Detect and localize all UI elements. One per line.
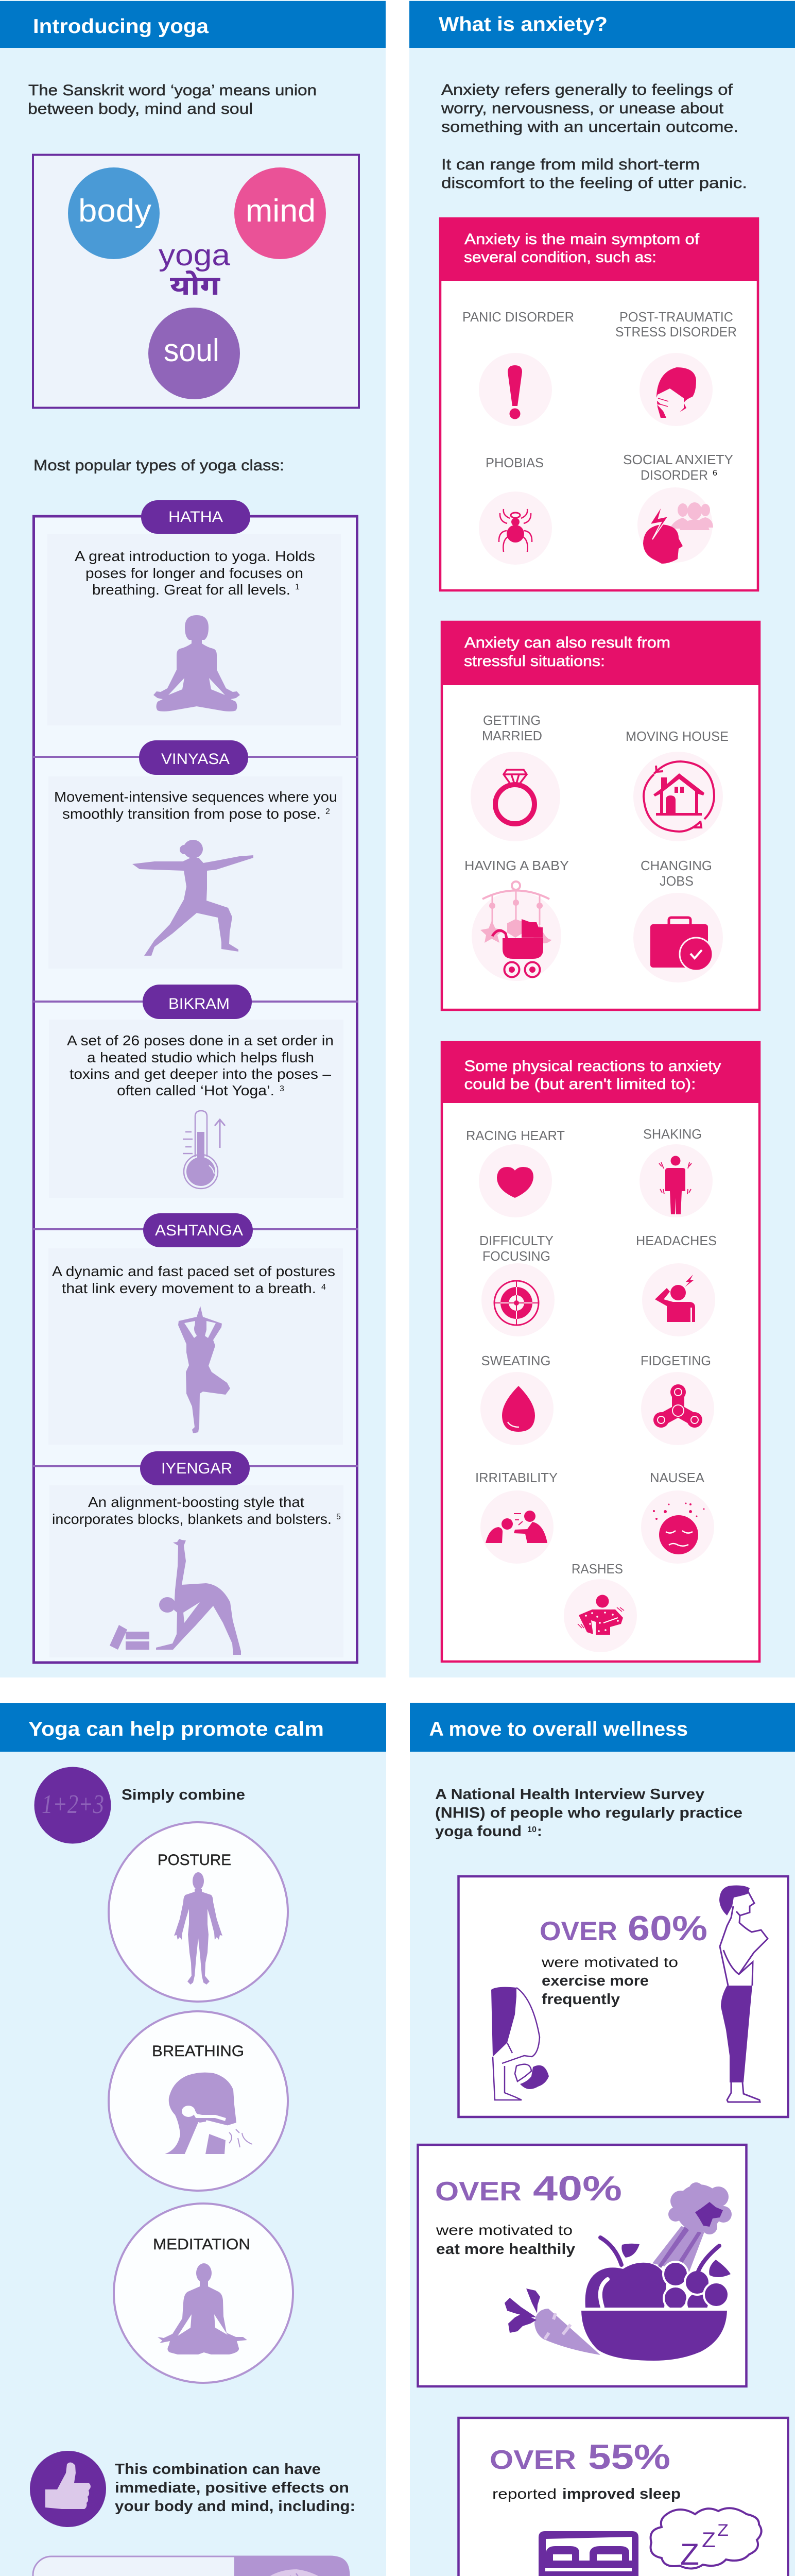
- icon: seated lotus pose: [153, 615, 240, 711]
- stat: exercise: frequently: [542, 1991, 620, 2008]
- item: phobias: PHOBIAS: [486, 455, 544, 470]
- item: having a baby: [464, 858, 569, 981]
- class: bikram: a heated studio which helps flush: [87, 1049, 314, 1065]
- item: social anxiety: SOCIAL ANXIETY: [623, 452, 733, 467]
- class: hatha: 1: [295, 583, 300, 591]
- class: ashtanga: ASHTANGA: [155, 1222, 243, 1239]
- heading bar: promote calm: Yoga can help promote calm: [28, 1718, 324, 1740]
- combination text: [115, 2461, 355, 2515]
- benefit: concentration: [33, 2556, 350, 2576]
- class: ashtanga: A dynamic and fast paced set of postures: [52, 1263, 335, 1279]
- panel: stressful situations: stressful situations:: [464, 653, 605, 670]
- panel: a move to overall wellness: [410, 1703, 795, 2576]
- panel: stressful situations: [441, 621, 761, 1010]
- stat: improved sleep: OVER: [490, 2445, 576, 2475]
- item: phobias: [479, 455, 552, 565]
- panel: stressful situations: Anxiety can also result from: [464, 634, 670, 651]
- item: fidgeting: [641, 1353, 714, 1445]
- heading bar: introducing yoga: Introducing yoga: [33, 15, 209, 38]
- stat: eat healthily: [418, 2145, 747, 2386]
- item: racing heart: RACING HEART: [466, 1128, 565, 1143]
- item: social anxiety: DISORDER: [641, 467, 708, 483]
- class: hatha: breathing. Great for all levels.: [92, 582, 290, 598]
- icon: tree pose: [178, 1306, 230, 1433]
- icon: standing man: [719, 1886, 768, 2102]
- item: moving house: MOVING HOUSE: [626, 728, 729, 744]
- item: social anxiety: 6: [713, 469, 717, 478]
- icon: triangle pose with blocks: [110, 1539, 241, 1655]
- panel: conditions: several condition, such as:: [464, 249, 656, 266]
- panel: physical reactions: [441, 1041, 761, 1662]
- panel: yoga class list: [33, 500, 358, 1663]
- survey text: 10: [527, 1825, 537, 1834]
- circle: breathing: BREATHING: [152, 2043, 244, 2060]
- item: rashes: [564, 1561, 637, 1652]
- anxiety definition text: Anxiety refers generally to feelings of: [441, 81, 733, 98]
- circle: posture: POSTURE: [158, 1852, 231, 1869]
- diagram: body mind soul: योग: [170, 271, 220, 306]
- class: ashtanga: [33, 1213, 358, 1445]
- item: moving house: [626, 728, 729, 841]
- heading bar: introducing yoga: [0, 1, 386, 48]
- class: ashtanga: 4: [321, 1283, 326, 1292]
- stat: eat healthily: 40%: [533, 2169, 622, 2208]
- panel: introducing yoga: [0, 0, 386, 1677]
- class: bikram: A set of 26 poses done in a set order in: [67, 1032, 334, 1048]
- item: racing heart: [466, 1128, 565, 1217]
- class: iyengar: incorporates blocks, blankets and bolsters.: [52, 1511, 332, 1527]
- class: bikram: 3: [280, 1084, 284, 1093]
- stat: eat healthily: were motivated to: [436, 2222, 573, 2238]
- item: rashes: RASHES: [572, 1561, 623, 1577]
- icon: 1+2+3 badge: 1+2+3: [42, 1790, 104, 1819]
- item: headaches: HEADACHES: [636, 1233, 717, 1248]
- stat: exercise: exercise more: [542, 1973, 649, 1989]
- panel: conditions: Anxiety is the main symptom of: [464, 231, 700, 248]
- class: bikram: often called ‘Hot Yoga’.: [117, 1082, 274, 1098]
- heading bar: what is anxiety: What is anxiety?: [439, 13, 608, 36]
- stat: exercise: [458, 1876, 788, 2117]
- subheading: simply combine: Simply combine: [122, 1787, 245, 1803]
- item: irritability: IRRITABILITY: [475, 1470, 558, 1485]
- icon: fruit and vegetable bowl: [505, 2182, 732, 2361]
- item: changing jobs: [633, 858, 723, 982]
- item: PTSD: [615, 309, 737, 426]
- item: fidgeting: FIDGETING: [641, 1353, 711, 1368]
- class: iyengar: An alignment-boosting style that: [88, 1494, 304, 1510]
- intro text: [28, 82, 317, 117]
- stat: eat healthily: eat more healthily: [436, 2241, 575, 2258]
- class: iyengar: [33, 1451, 358, 1657]
- stat: improved sleep: 55%: [588, 2437, 670, 2477]
- class: vinyasa: smoothly transition from pose to pose.: [62, 806, 321, 822]
- heading bar: overall wellness: A move to overall wellness: [429, 1718, 688, 1740]
- class: bikram: [33, 985, 358, 1198]
- circle: breathing: [109, 2011, 288, 2191]
- heading bar: what is anxiety: [409, 1, 795, 48]
- diagram: body mind soul: body: [78, 193, 151, 229]
- anxiety definition text: discomfort to the feeling of utter panic.: [441, 175, 747, 192]
- icon: 1+2+3 badge: [34, 1767, 111, 1843]
- class: hatha: poses for longer and focuses on: [85, 565, 303, 581]
- item: shaking: [640, 1126, 713, 1217]
- item: panic disorder: [462, 309, 574, 426]
- combination text: This combination can have: [115, 2461, 321, 2478]
- combination text: immediate, positive effects on: [115, 2480, 349, 2496]
- circle: meditation: [114, 2204, 293, 2383]
- item: sweating: [480, 1353, 554, 1445]
- icon: forward bending figure: [491, 1987, 549, 2100]
- icon: bed: [539, 2531, 638, 2576]
- item: nausea: [641, 1470, 714, 1564]
- item: PTSD: STRESS DISORDER: [615, 324, 737, 340]
- class: vinyasa: 2: [325, 807, 330, 816]
- survey text: yoga found: [435, 1823, 522, 1840]
- item: getting married: MARRIED: [482, 728, 542, 743]
- icon: sleep cloud: Z: [680, 2538, 699, 2571]
- item: sweating: SWEATING: [481, 1353, 551, 1368]
- diagram: body mind soul: yoga: [159, 239, 231, 272]
- icon: sleep cloud: Z: [702, 2528, 716, 2552]
- anxiety definition text: [441, 81, 747, 192]
- item: PTSD: POST-TRAUMATIC: [619, 309, 733, 325]
- icon: sleep cloud: [651, 2508, 762, 2571]
- panel: physical reactions: could be (but aren't limited to):: [464, 1076, 696, 1093]
- intro text: between body, mind and soul: [28, 100, 253, 117]
- item: irritability: [475, 1470, 558, 1564]
- panel: yoga can help promote calm: [0, 1703, 386, 2576]
- class: iyengar: IYENGAR: [161, 1460, 232, 1477]
- icon: warrior pose: [132, 840, 253, 956]
- class: vinyasa: Movement-intensive sequences where you: [54, 789, 337, 805]
- item: getting married: [471, 713, 560, 841]
- survey text: A National Health Interview Survey: [435, 1786, 704, 1803]
- item: difficulty focusing: FOCUSING: [482, 1248, 550, 1264]
- diagram: body mind soul: soul: [164, 333, 219, 368]
- class: hatha: HATHA: [168, 509, 223, 526]
- icon: sleep cloud: Z: [717, 2521, 729, 2539]
- stat: exercise: 60%: [628, 1909, 707, 1948]
- panel: conditions: [439, 217, 759, 590]
- icon: brain: [250, 2569, 333, 2576]
- anxiety definition text: It can range from mild short-term: [441, 156, 700, 173]
- intro text: The Sanskrit word ‘yoga’ means union: [28, 82, 317, 99]
- circle: posture: [109, 1822, 288, 2002]
- panel: what is anxiety: [409, 0, 795, 1677]
- item: having a baby: HAVING A BABY: [464, 858, 569, 873]
- class: vinyasa: [33, 740, 358, 969]
- subheading: class types: Most popular types of yoga class:: [33, 457, 284, 474]
- item: changing jobs: CHANGING: [641, 858, 712, 873]
- class: bikram: toxins and get deeper into the poses –: [70, 1066, 331, 1082]
- icon: thumbs up badge: [30, 2451, 106, 2527]
- class: ashtanga: that link every movement to a breath.: [62, 1280, 316, 1296]
- combination text: your body and mind, including:: [115, 2498, 355, 2515]
- icon: thermometer: [183, 1111, 225, 1189]
- stat: eat healthily: OVER: [435, 2177, 522, 2207]
- item: panic disorder: PANIC DISORDER: [462, 309, 574, 325]
- item: social anxiety: [623, 452, 733, 564]
- survey text: [435, 1786, 742, 1840]
- class: hatha: [47, 500, 341, 725]
- item: difficulty focusing: [479, 1233, 555, 1336]
- item: changing jobs: JOBS: [660, 873, 694, 889]
- heading bar: promote calm: [0, 1703, 386, 1752]
- item: difficulty focusing: DIFFICULTY: [479, 1233, 554, 1248]
- diagram: body mind soul: mind: [246, 193, 316, 229]
- stat: exercise: were motivated to: [541, 1954, 678, 1970]
- heading bar: overall wellness: [410, 1703, 795, 1752]
- anxiety definition text: something with an uncertain outcome.: [441, 118, 738, 135]
- diagram: body mind soul: [33, 155, 359, 408]
- panel: physical reactions: Some physical reactions to anxiety: [464, 1058, 721, 1075]
- class: iyengar: 5: [336, 1513, 341, 1521]
- stat: improved sleep: reported: [492, 2486, 557, 2502]
- stat: improved sleep: [458, 2418, 788, 2576]
- item: nausea: NAUSEA: [650, 1470, 705, 1485]
- anxiety definition text: worry, nervousness, or unease about: [441, 100, 724, 117]
- item: getting married: GETTING: [483, 713, 541, 728]
- circle: meditation: MEDITATION: [153, 2236, 250, 2253]
- stat: exercise: OVER: [540, 1917, 617, 1946]
- class: vinyasa: VINYASA: [161, 751, 230, 768]
- class: bikram: BIKRAM: [168, 995, 230, 1012]
- stat: improved sleep: improved sleep: [562, 2486, 681, 2502]
- survey text: :: [537, 1823, 542, 1840]
- class: hatha: A great introduction to yoga. Holds: [75, 548, 315, 564]
- item: headaches: [636, 1233, 717, 1336]
- item: shaking: SHAKING: [643, 1126, 702, 1142]
- survey text: (NHIS) of people who regularly practice: [435, 1805, 742, 1821]
